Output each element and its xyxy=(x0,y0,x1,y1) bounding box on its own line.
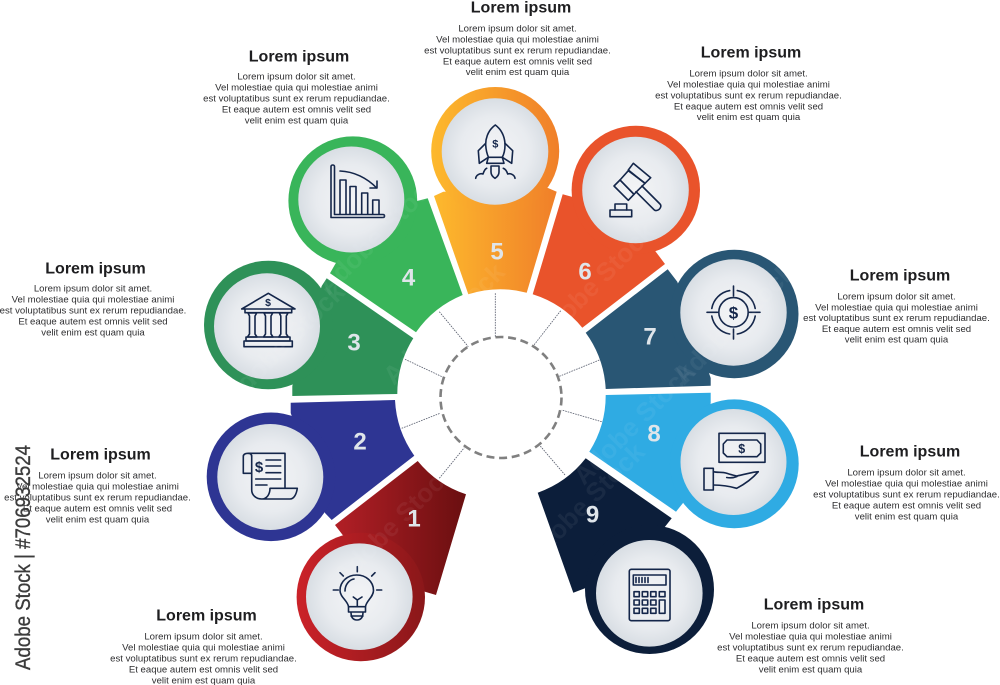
panel: step 1 xyxy=(297,461,466,661)
text block: step 6: Et eaque autem est omnis velit sed xyxy=(674,102,823,112)
faint diagonal watermarks: Adobe Stock xyxy=(567,356,701,490)
text block: step 3: est voluptatibus sunt ex rerum repudiandae. xyxy=(0,306,186,316)
disc 9 xyxy=(596,540,703,647)
icon glyph: dollar sign: $ xyxy=(738,442,745,456)
icon glyph: dollar sign: $ xyxy=(255,459,264,476)
disc 7 xyxy=(680,259,787,366)
text block: step 4: Lorem ipsum xyxy=(249,48,349,66)
panel: step 7 xyxy=(586,250,798,389)
disc 4 xyxy=(298,146,404,252)
ring 5 xyxy=(431,87,559,215)
text block: step 2: Lorem ipsum xyxy=(50,446,151,464)
text block: step 7: velit enim est quam quia xyxy=(845,334,949,346)
text block: step 1: Vel molestiae quia qui molestiae animi xyxy=(122,642,285,654)
ring 6 xyxy=(572,126,700,254)
dotted connector lines xyxy=(402,293,602,478)
text block: step 8: est voluptatibus sunt ex rerum repudiandae. xyxy=(813,490,1000,500)
text block: step 1: est voluptatibus sunt ex rerum repudiandae. xyxy=(110,654,297,664)
text block: step 5: Vel molestiae quia qui molestiae animi xyxy=(436,34,599,46)
text block: step 5: Lorem ipsum xyxy=(471,0,571,16)
segment 9 xyxy=(538,458,672,593)
text block: step 3: Lorem ipsum xyxy=(45,260,146,278)
icon: target with dollar xyxy=(707,286,760,339)
icon: light bulb xyxy=(333,567,382,620)
text block: step 1: Lorem ipsum xyxy=(156,608,257,624)
text block: step 2 xyxy=(4,446,191,526)
text block: step 1: Et eaque autem est omnis velit sed xyxy=(129,664,278,676)
segment 2 xyxy=(291,400,414,520)
text block: step 5: Et eaque autem est omnis velit sed xyxy=(443,56,592,68)
icon: receipt xyxy=(243,453,297,499)
text block: step 1: Lorem ipsum dolor sit amet. xyxy=(144,632,263,642)
faint diagonal watermarks: Adobe Stock xyxy=(667,256,801,390)
text block: step 9: Et eaque autem est omnis velit sed xyxy=(736,654,885,664)
text block: step 4: Et eaque autem est omnis velit sed xyxy=(222,104,371,116)
icon glyph: dollar sign: $ xyxy=(492,138,498,150)
stock id vertical label: Adobe Stock | #706932524 xyxy=(12,445,35,670)
number 9: 9 xyxy=(586,502,599,528)
ring 8 xyxy=(670,399,799,528)
text block: step 9: velit enim est quam quia xyxy=(759,664,863,676)
icon: falling bar chart xyxy=(331,165,384,218)
disc 1 xyxy=(306,543,413,650)
icon: rocket xyxy=(476,125,515,178)
number 6: 6 xyxy=(578,258,592,286)
text block: step 5: est voluptatibus sunt ex rerum repudiandae. xyxy=(424,46,611,56)
ring 4 xyxy=(288,136,417,265)
text block: step 6: velit enim est quam quia xyxy=(697,112,801,123)
faint diagonal watermarks: Adobe Stock xyxy=(327,456,461,590)
disc 8 xyxy=(680,409,786,515)
text block: step 4: velit enim est quam quia xyxy=(245,116,349,126)
text block: step 8 xyxy=(813,444,1000,522)
panel: step 6 xyxy=(533,126,700,328)
faint diagonal watermarks: Adobe Stock xyxy=(527,216,661,350)
text block: step 7: Lorem ipsum dolor sit amet. xyxy=(837,292,956,302)
panel: step 2 xyxy=(207,400,414,541)
text block: step 6: Lorem ipsum dolor sit amet. xyxy=(689,68,808,80)
segment 7 xyxy=(586,269,711,389)
text block: step 7: Lorem ipsum xyxy=(850,268,950,284)
text block: step 5: Lorem ipsum dolor sit amet. xyxy=(458,24,577,34)
icon glyph: dollar sign: $ xyxy=(729,304,739,322)
number 5: 5 xyxy=(490,238,504,266)
panel: step 3 xyxy=(204,261,413,396)
ring 7 xyxy=(670,250,798,378)
text block: step 5: velit enim est quam quia xyxy=(466,67,570,78)
icon: hand holding banknote xyxy=(704,433,765,490)
text block: step 9 xyxy=(717,596,904,676)
text block: step 8: Lorem ipsum xyxy=(860,444,960,460)
icon glyph: dollar sign: $ xyxy=(265,297,271,309)
disc 6 xyxy=(582,137,689,243)
segment 6 xyxy=(533,194,665,328)
text block: step 2: velit enim est quam quia xyxy=(46,514,150,526)
ring 9 xyxy=(585,525,714,654)
text block: step 2: est voluptatibus sunt ex rerum repudiandae. xyxy=(4,492,191,504)
text block: step 6 xyxy=(655,44,842,123)
text block: step 8: velit enim est quam quia xyxy=(855,512,959,522)
segment 3 xyxy=(292,278,413,396)
text block: step 7: Et eaque autem est omnis velit sed xyxy=(822,324,971,335)
panel: step 4 xyxy=(288,136,463,332)
text block: step 9: est voluptatibus sunt ex rerum repudiandae. xyxy=(717,642,904,654)
text block: step 8: Lorem ipsum dolor sit amet. xyxy=(847,468,966,478)
text block: step 3 xyxy=(0,260,186,338)
disc 2 xyxy=(217,424,323,530)
number 8: 8 xyxy=(647,420,661,448)
text block: step 9: Vel molestiae quia qui molestiae animi xyxy=(729,632,892,642)
text block: step 7: Vel molestiae quia qui molestiae animi xyxy=(815,302,978,314)
text block: step 8: Vel molestiae quia qui molestiae animi xyxy=(825,478,988,490)
text block: step 3: Vel molestiae quia qui molestiae animi xyxy=(12,294,174,306)
text block: step 6: Vel molestiae quia qui molestiae animi xyxy=(667,80,830,90)
number 3: 3 xyxy=(347,330,361,356)
panel: step 8 xyxy=(589,393,799,528)
icon: calculator xyxy=(629,569,670,621)
text block: step 5 xyxy=(424,0,611,78)
disc 3 xyxy=(214,273,320,379)
faint diagonal watermarks: Adobe Stock xyxy=(517,436,651,570)
text block: step 9: Lorem ipsum xyxy=(764,596,864,614)
panel: step 5 xyxy=(431,87,559,294)
faint diagonal watermarks: Adobe Stock xyxy=(217,276,351,410)
text block: step 4: Lorem ipsum dolor sit amet. xyxy=(237,72,356,82)
segment 1 xyxy=(335,461,466,595)
ring 3 xyxy=(204,261,333,389)
faint diagonal watermarks xyxy=(217,166,801,590)
number 7: 7 xyxy=(643,324,657,350)
number 1: 1 xyxy=(407,506,421,532)
text block: step 4 xyxy=(203,48,390,126)
segment 4 xyxy=(330,198,463,332)
text block: step 9: Lorem ipsum dolor sit amet. xyxy=(751,620,870,632)
text block: step 2: Et eaque autem est omnis velit sed xyxy=(23,504,172,514)
ring 1 xyxy=(297,533,425,661)
centre dashed circle xyxy=(440,337,562,458)
text block: step 2: Lorem ipsum dolor sit amet. xyxy=(38,470,157,482)
text block: step 4: est voluptatibus sunt ex rerum repudiandae. xyxy=(203,94,390,104)
text block: step 3: Et eaque autem est omnis velit sed xyxy=(18,316,168,328)
segment 5 xyxy=(434,188,557,294)
disc 5 xyxy=(442,98,548,205)
panel: step 9 xyxy=(538,458,714,654)
text block: step 7: est voluptatibus sunt ex rerum repudiandae. xyxy=(803,313,990,324)
text block: step 3: velit enim est quam quia xyxy=(41,328,145,338)
text block: step 2: Vel molestiae quia qui molestiae animi xyxy=(16,482,179,492)
text block: step 6: Lorem ipsum xyxy=(701,44,801,62)
icon: gavel xyxy=(610,163,661,217)
segment 8 xyxy=(589,393,711,512)
text block: step 1 xyxy=(110,608,297,685)
text block: step 4: Vel molestiae quia qui molestiae animi xyxy=(215,82,378,94)
faint diagonal watermarks: Adobe Stock xyxy=(312,166,446,300)
text block: step 3: Lorem ipsum dolor sit amet. xyxy=(34,284,152,294)
text block: step 8: Et eaque autem est omnis velit sed xyxy=(832,500,981,512)
faint diagonal watermarks: Adobe Stock xyxy=(377,256,511,390)
number 2: 2 xyxy=(353,428,367,456)
number 4: 4 xyxy=(402,264,416,292)
icon: bank xyxy=(242,293,295,347)
text block: step 7 xyxy=(803,268,990,346)
ring 2 xyxy=(207,412,335,541)
text block: step 6: est voluptatibus sunt ex rerum repudiandae. xyxy=(655,90,842,102)
